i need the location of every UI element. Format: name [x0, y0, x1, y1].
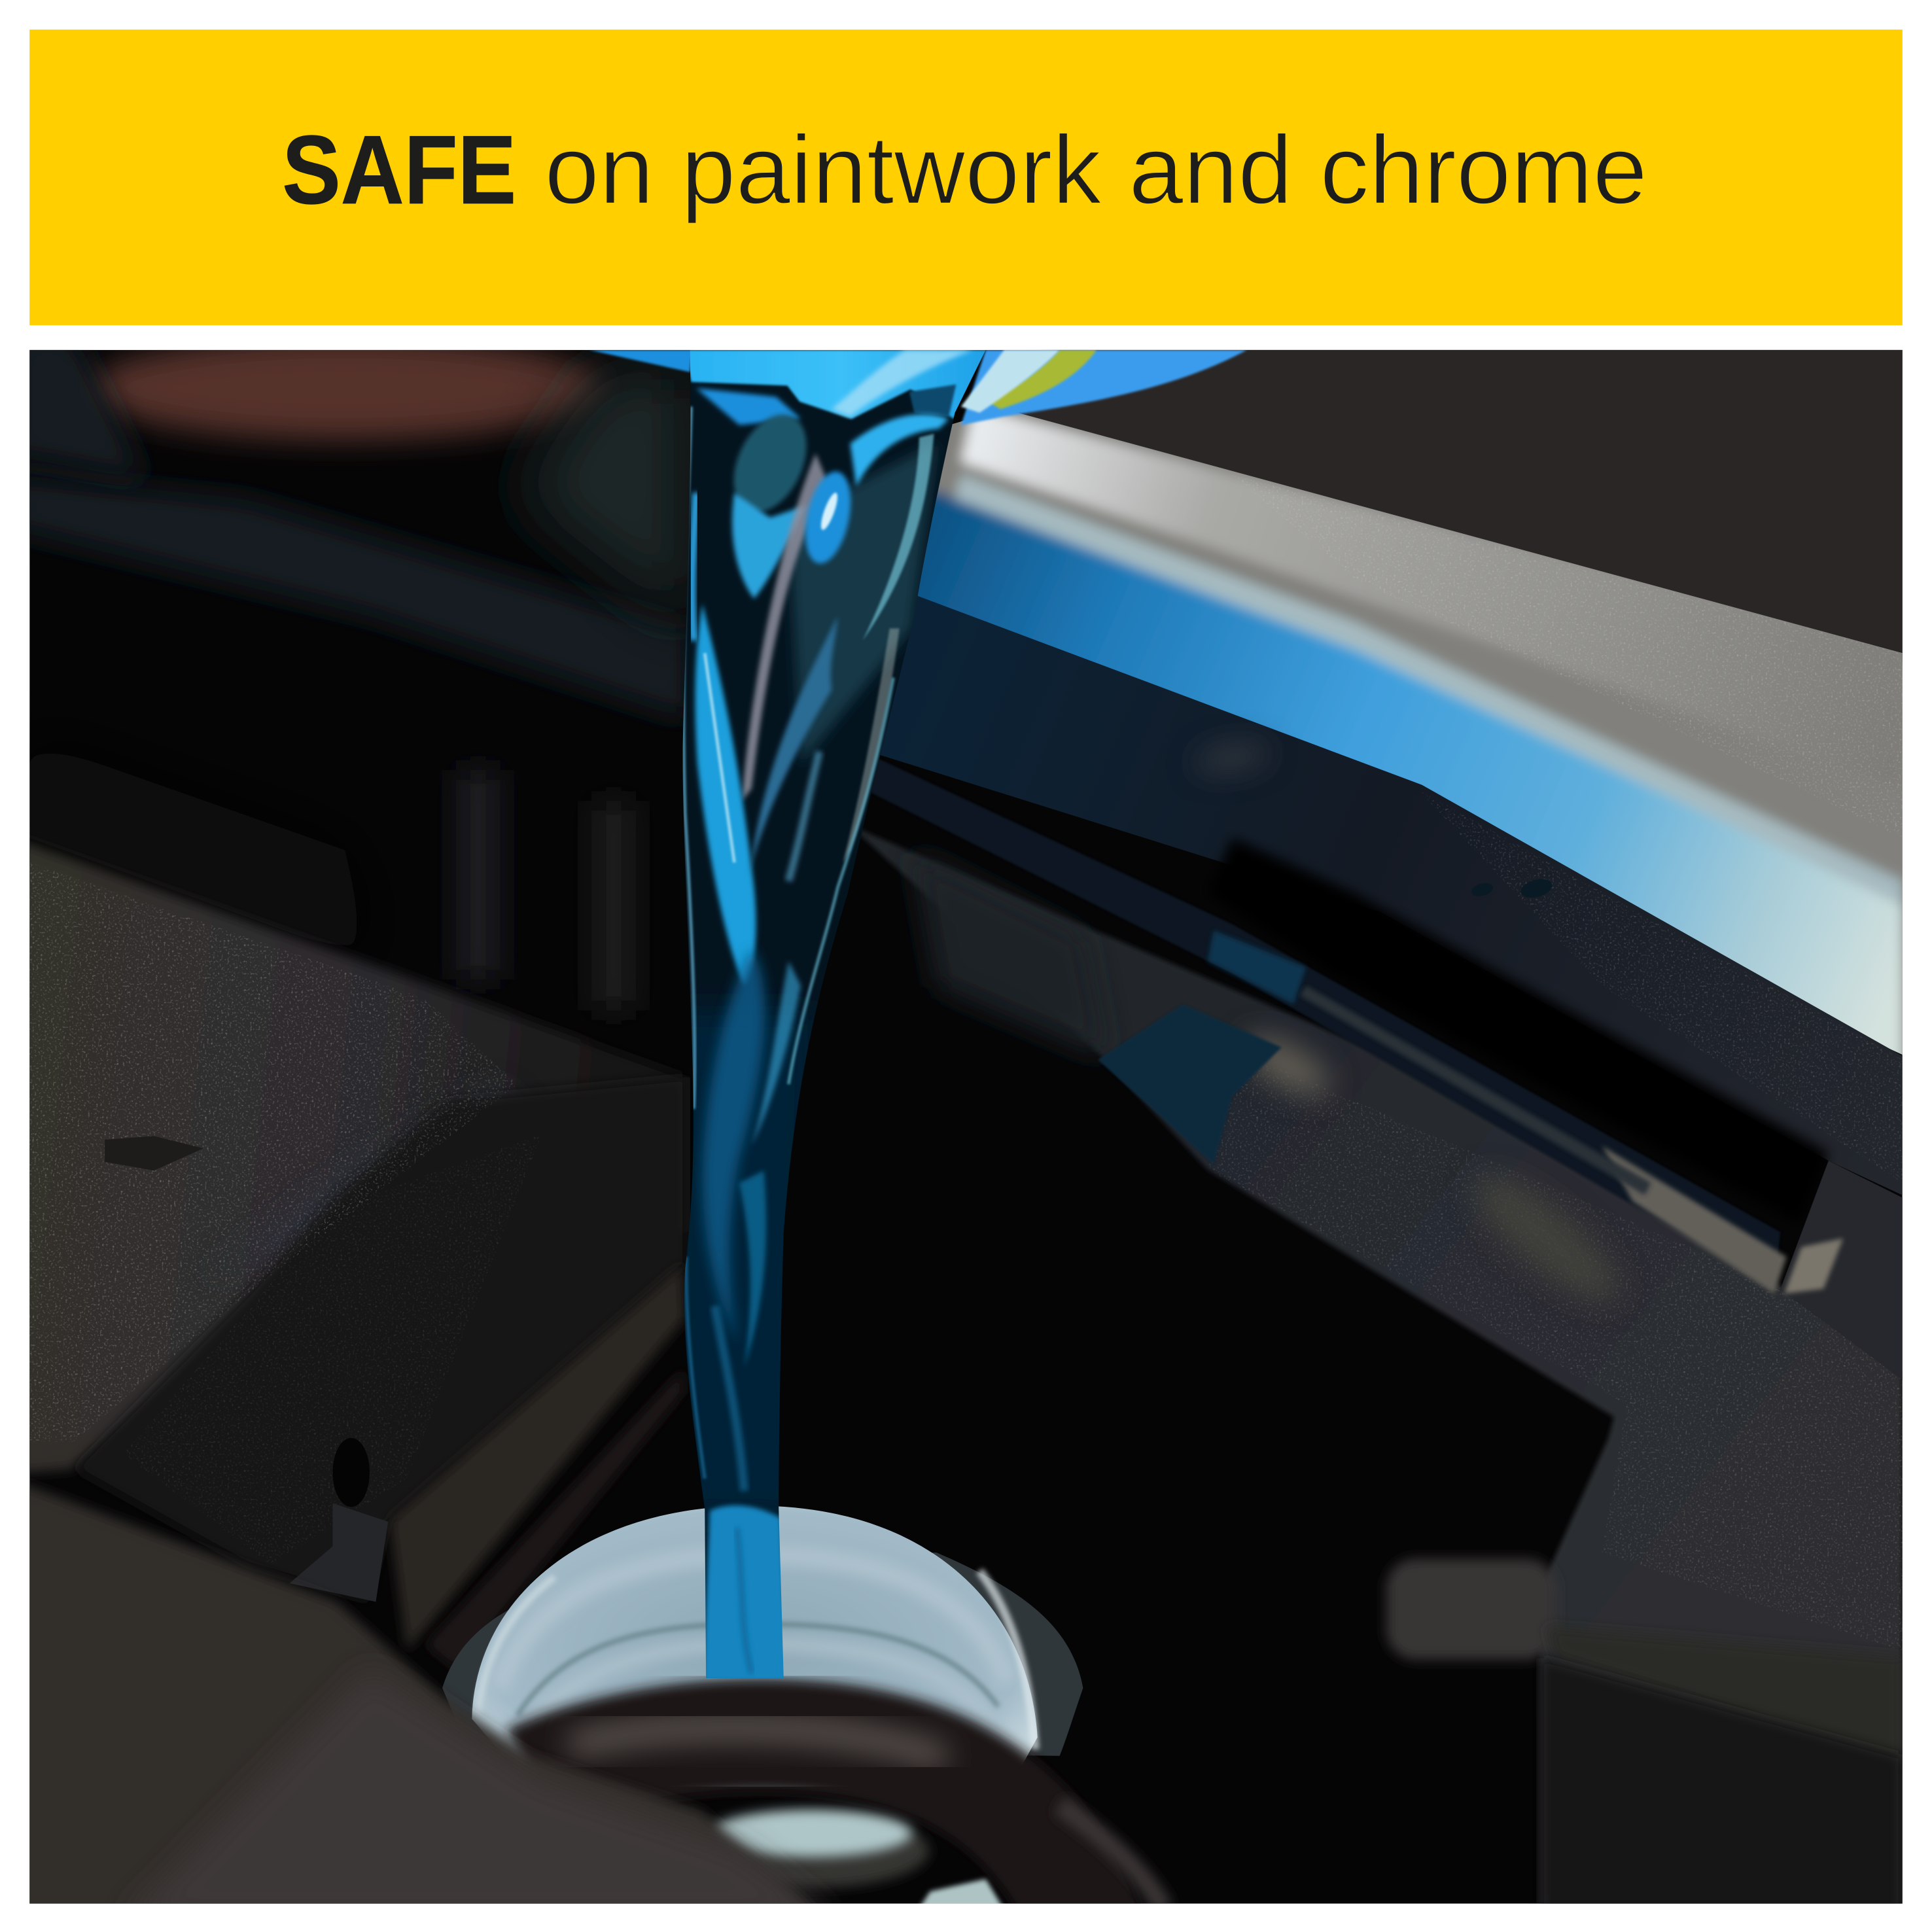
dust patches on panel — [1193, 739, 1636, 1320]
dashed mark on cover — [105, 1136, 203, 1170]
fluid stream — [665, 350, 1010, 1687]
windscreen — [917, 413, 1903, 1055]
reservoir neck — [472, 1505, 1038, 1787]
title banner — [29, 29, 1903, 325]
black rubber seal — [877, 591, 1903, 1195]
stream: swirl — [798, 467, 858, 568]
blurred black hose — [530, 1727, 1165, 1932]
dusty right panel — [850, 826, 1903, 1904]
stream: bright central ribbon — [695, 604, 756, 986]
long rubber strip — [862, 754, 1787, 1293]
stream: dark blob — [719, 403, 821, 523]
stream: right edge glints — [788, 678, 893, 1084]
stream: navy lower body — [671, 1010, 813, 1515]
stream: curved blue band — [749, 616, 838, 875]
black channel in seal — [1208, 838, 1829, 1223]
grain on silver edge — [1232, 474, 1903, 838]
blurred foreground body — [12, 1480, 838, 1922]
blurred background, brown top left — [86, 336, 604, 440]
stream: bright top lip — [684, 350, 998, 419]
stream: left rim highlights — [684, 406, 695, 1109]
left cover: dark lower face — [74, 1077, 686, 1602]
stream: mid blue shimmer — [703, 949, 765, 1343]
left cover: lit corner tint — [197, 1084, 530, 1282]
raised strip — [389, 1264, 685, 1651]
panel grain — [1208, 1047, 1903, 1651]
right clip tab — [1780, 1161, 1903, 1380]
title text: on paintwork and chrome — [544, 115, 1647, 224]
blurred background, top right — [1020, 349, 1903, 667]
reservoir outer ring — [442, 1553, 1083, 1756]
stream: right clear highlight — [862, 434, 934, 641]
small plastic clip — [290, 1438, 388, 1602]
wet patch on panel — [1098, 1004, 1282, 1165]
lower pale opening — [702, 1810, 1004, 1910]
lower right hose connector — [1386, 1558, 1903, 1922]
water drops on seal — [1470, 876, 1554, 901]
bottle nozzle — [589, 350, 1247, 425]
blurred background, cylinder — [456, 770, 636, 1010]
stream: pale streak — [742, 453, 828, 801]
blurred background, navy band — [12, 474, 690, 721]
stream: bright lower section — [702, 1505, 788, 1682]
grain on seal — [1417, 788, 1903, 1183]
stream: light blue pool — [732, 493, 807, 599]
left cover grain — [29, 862, 518, 1441]
left engine cover: top face — [12, 838, 686, 1473]
title text: SAFE — [282, 115, 516, 224]
